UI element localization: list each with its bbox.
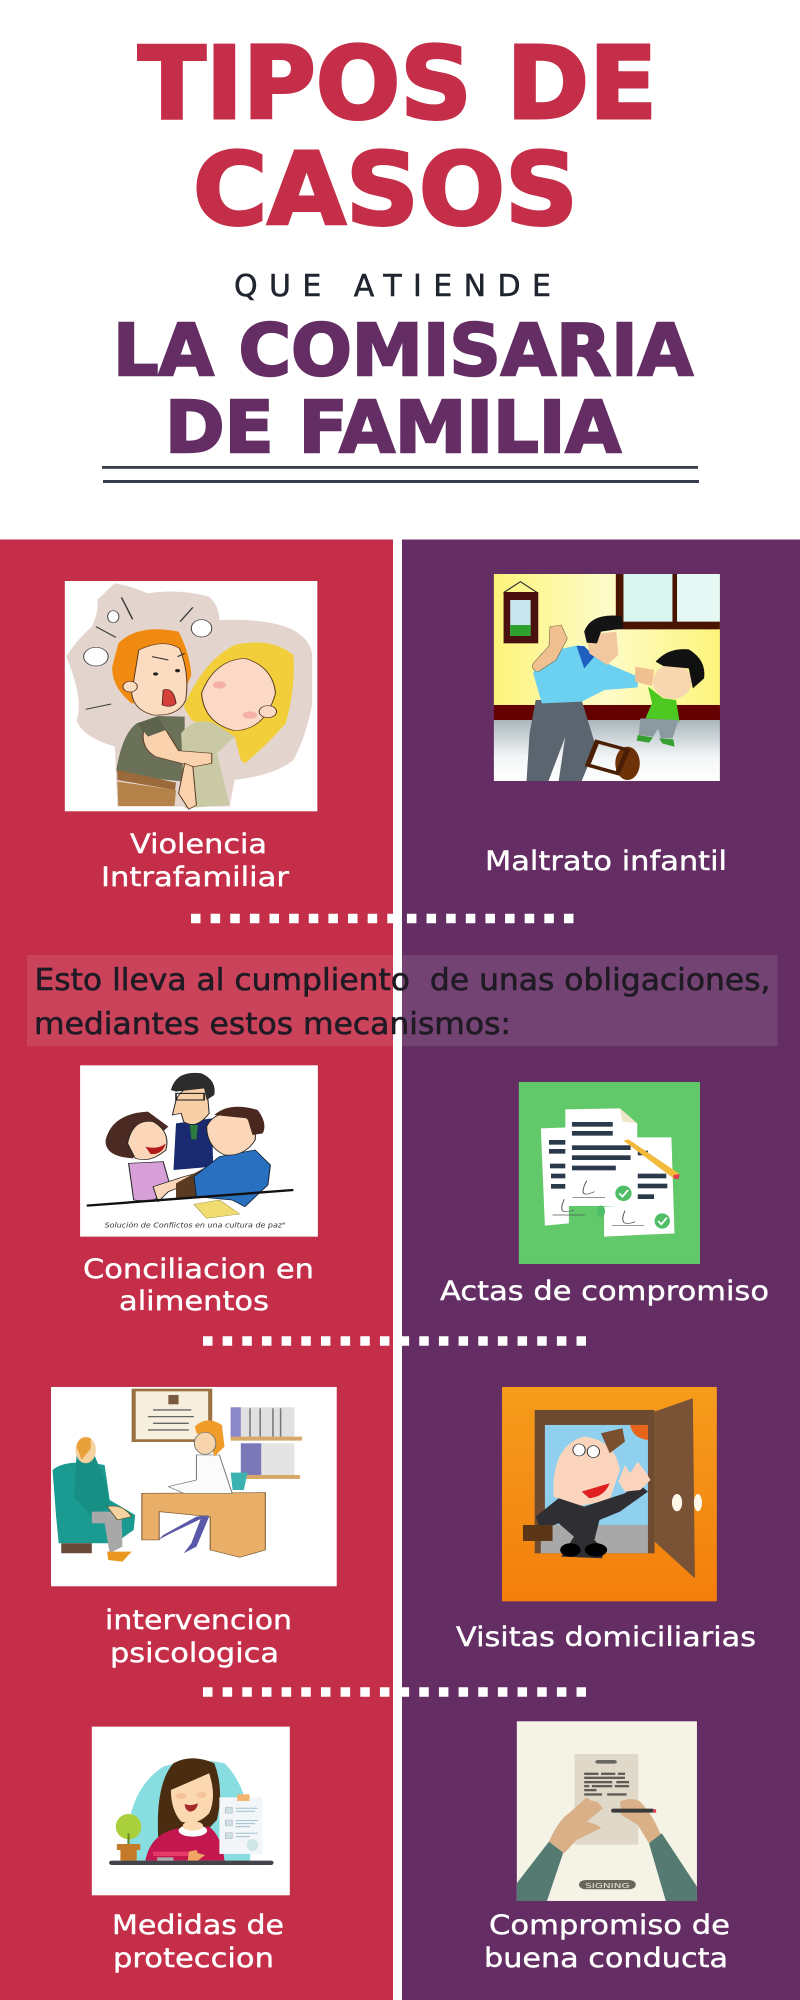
panel: purple column <box>402 540 800 2000</box>
illustration: conciliacion three people <box>80 1065 318 1237</box>
label: intervencion psicologica: psicologica <box>110 1638 279 1669</box>
label: intervencion psicologica <box>105 1605 292 1669</box>
label: medidas de proteccion: Medidas de <box>112 1910 284 1941</box>
illustration: maltrato infantil father and child <box>494 574 720 781</box>
illustration: compromiso hands signing: SIGNING <box>585 1882 630 1890</box>
label: medidas de proteccion: proteccion <box>113 1943 274 1974</box>
label: conciliacion en alimentos: Conciliacion en <box>83 1254 314 1285</box>
illustration: compromiso hands signing <box>517 1721 697 1901</box>
heading: la comisaria de familia <box>113 309 693 469</box>
illustration: conciliacion three people: Solución de Conflictos en una cultura de paz" <box>105 1221 286 1230</box>
label: conciliacion en alimentos: alimentos <box>119 1286 269 1317</box>
dotted divider 3 <box>203 1687 586 1697</box>
illustration: actas de compromiso documents <box>519 1082 700 1264</box>
title: tipos de casos: TIPOS DE <box>138 25 657 142</box>
callout text <box>34 963 770 1042</box>
label: violencia intrafamiliar: Intrafamiliar <box>101 862 290 893</box>
callout text: mediantes estos mecanismos: <box>34 1007 511 1042</box>
label: compromiso de buena conducta: Compromiso de <box>489 1910 730 1941</box>
label: medidas de proteccion <box>112 1910 284 1974</box>
illustration: visitas domiciliarias man at door <box>502 1387 717 1601</box>
panel: red column <box>0 540 393 2000</box>
label: maltrato infantil: Maltrato infantil <box>485 846 727 877</box>
heading: la comisaria de familia: DE FAMILIA <box>165 386 621 469</box>
label: violencia intrafamiliar <box>101 829 290 893</box>
title: tipos de casos: CASOS <box>193 131 578 248</box>
illustration: intervencion psicologica office <box>51 1387 337 1586</box>
heading: la comisaria de familia: LA COMISARIA <box>113 309 693 392</box>
callout text: Esto lleva al cumpliento de unas obligaciones, <box>34 963 770 998</box>
illustration: violencia intrafamiliar couple <box>65 581 317 811</box>
label: compromiso de buena conducta: buena conducta <box>484 1943 728 1974</box>
subtitle: que atiende: QUE ATIENDE <box>234 269 551 304</box>
label: violencia intrafamiliar: Violencia <box>130 829 267 860</box>
label: actas de compromiso: Actas de compromiso <box>440 1276 769 1307</box>
label: conciliacion en alimentos <box>83 1254 314 1317</box>
illustration: medidas de proteccion woman with checklist <box>92 1727 290 1895</box>
dotted divider 1 <box>191 914 574 923</box>
dotted divider 2 <box>203 1336 586 1346</box>
callout band <box>27 955 778 1046</box>
label: compromiso de buena conducta <box>484 1910 730 1974</box>
title: tipos de casos <box>138 25 657 248</box>
double rule under heading <box>102 466 699 483</box>
label: intervencion psicologica: intervencion <box>105 1605 292 1636</box>
label: visitas domiciliarias: Visitas domiciliarias <box>456 1622 756 1653</box>
